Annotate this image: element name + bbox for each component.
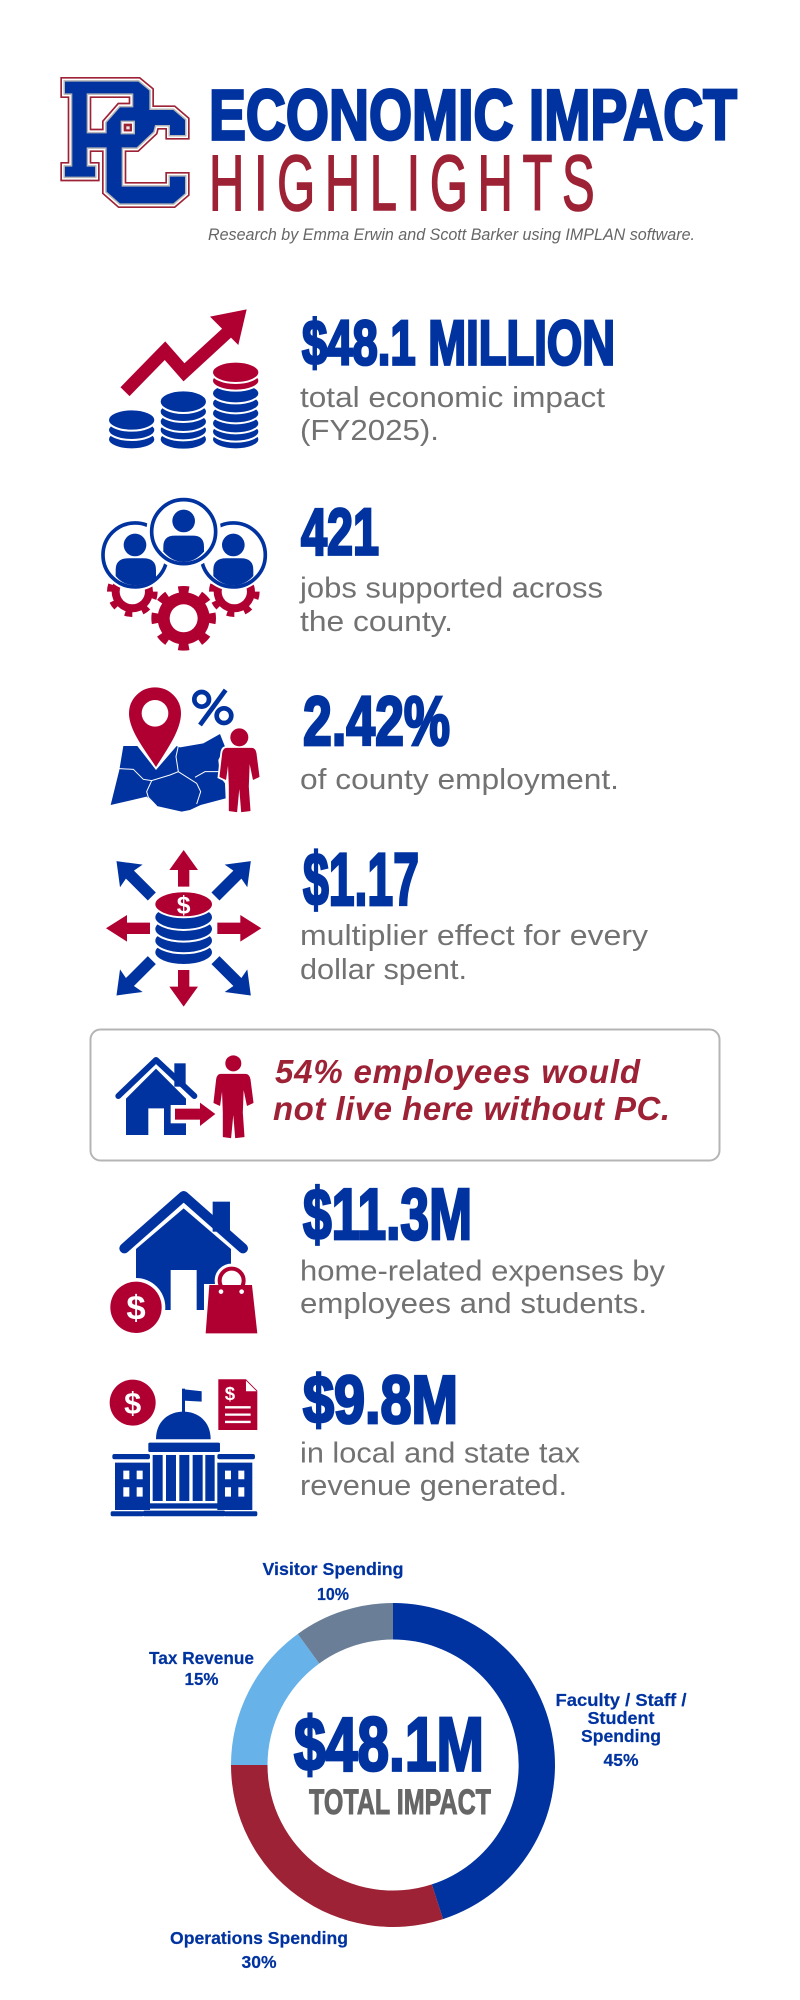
stat: total economic impact: $48.1 MILLION: [302, 308, 615, 378]
label: tax revenue: Tax Revenue: [149, 1648, 254, 1668]
stat: multiplier effect: multiplier effect for every: [300, 920, 649, 952]
label: operations spending: 30%: [242, 1952, 277, 1972]
stat: tax revenue: [300, 1362, 581, 1502]
stat: multiplier effect: dollar spent.: [300, 954, 467, 986]
icon: map pin, percent and person: [111, 687, 259, 812]
segment: operations spending 30%: [231, 1765, 443, 1927]
label: visitor spending: [262, 1559, 404, 1604]
icon: coin stack with arrows: [105, 850, 262, 1007]
stat: tax revenue: $9.8M: [303, 1362, 458, 1438]
subtitle: research credit: Research by Emma Erwin and Scott Barker using IMPLAN software.: [208, 225, 695, 244]
logo: PC monogram: [65, 82, 185, 203]
icon: people and gears: [99, 494, 269, 647]
icon: capitol building, coin and tax form: [110, 1379, 257, 1516]
icon: capitol building, coin and tax form: $: [225, 1383, 236, 1404]
donut chart: impact breakdown: [149, 1559, 687, 1972]
callout text: not live here without PC.: [273, 1090, 670, 1127]
stat: home-related expenses: home-related expenses by: [300, 1256, 666, 1288]
header: [65, 76, 737, 244]
stat: total economic impact: total economic impact: [300, 382, 605, 414]
stat: tax revenue: revenue generated.: [300, 1470, 567, 1502]
donut center label: TOTAL IMPACT: [309, 1783, 491, 1822]
icon: house arrow person: [118, 1055, 253, 1138]
stat: county employment: 2.42%: [303, 682, 450, 760]
stat: total economic impact: (FY2025).: [300, 415, 439, 447]
label: operations spending: [170, 1928, 348, 1972]
stat: multiplier effect: [300, 838, 649, 986]
label: faculty staff student spending: Spending: [581, 1726, 661, 1746]
icon: house, coin and shopping bag: $: [126, 1289, 146, 1327]
callout: employees would not live here: [90, 1030, 720, 1160]
icon: coin stack with arrows: $: [177, 892, 191, 919]
segment: visitor spending 10%: [298, 1603, 393, 1663]
stat: jobs supported: [299, 494, 603, 638]
label: faculty staff student spending: Student: [588, 1708, 655, 1728]
label: faculty staff student spending: Faculty / Staff /: [556, 1690, 687, 1710]
stat: county employment: [300, 682, 619, 796]
stat: tax revenue: in local and state tax: [300, 1438, 581, 1470]
stat: jobs supported: jobs supported across: [299, 573, 603, 605]
segment: tax revenue 15%: [231, 1634, 319, 1765]
stat: home-related expenses: [300, 1175, 666, 1320]
stat: multiplier effect: $1.17: [303, 838, 419, 921]
label: operations spending: Operations Spending: [170, 1928, 348, 1948]
icon: coins and rising arrow: [108, 309, 259, 450]
title: Highlights: HIGHLIGHTS: [209, 139, 595, 227]
stat: home-related expenses: employees and students.: [300, 1288, 647, 1320]
label: visitor spending: 10%: [317, 1584, 349, 1604]
stat: county employment: of county employment.: [300, 764, 619, 796]
stat: jobs supported: 421: [301, 494, 379, 568]
label: tax revenue: [149, 1648, 254, 1689]
callout text: 54% employees would: [275, 1053, 641, 1090]
callout text: [273, 1053, 670, 1127]
segment: faculty staff student spending 45%: [393, 1603, 555, 1919]
label: visitor spending: Visitor Spending: [262, 1559, 404, 1579]
icon: capitol building, coin and tax form: $: [124, 1386, 141, 1420]
stat: jobs supported: the county.: [300, 606, 453, 638]
stat: total economic impact: [300, 308, 615, 447]
stat: home-related expenses: $11.3M: [303, 1175, 472, 1255]
donut center value: $48.1M: [294, 1702, 484, 1788]
label: tax revenue: 15%: [184, 1669, 219, 1689]
label: faculty staff student spending: 45%: [604, 1750, 639, 1770]
icon: house, coin and shopping bag: [107, 1196, 257, 1337]
label: faculty staff student spending: [556, 1690, 687, 1770]
